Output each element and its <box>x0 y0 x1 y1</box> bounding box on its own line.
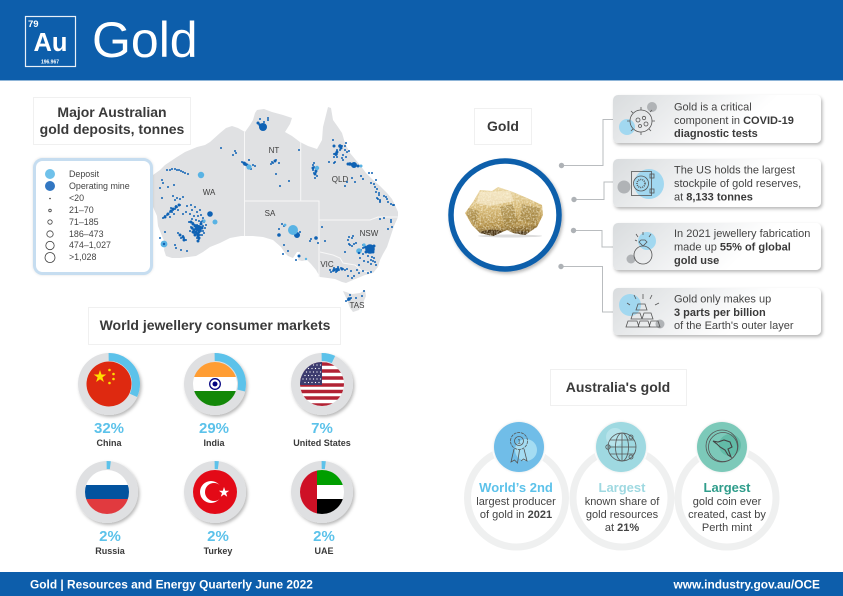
map legend: Deposit <box>69 169 100 179</box>
fact: largest known share: known share of <box>585 496 660 508</box>
state labels: SA <box>265 209 276 218</box>
icon: coin <box>695 420 749 474</box>
state labels: QLD <box>332 175 348 184</box>
donut: Russia 2% <box>76 461 138 556</box>
footer bar: www.industry.gov.au/OCE <box>673 578 820 592</box>
donut: Turkey 2%: Turkey <box>204 546 232 556</box>
donut: India 29%: India <box>203 438 225 448</box>
card: earth's outer layer: of the Earth's outer layer <box>674 320 794 332</box>
heading: gold: Gold <box>487 118 519 134</box>
map legend: 71–185 <box>69 217 99 227</box>
card: earth's outer layer <box>613 288 821 335</box>
donut: China 32%: 32% <box>94 420 124 437</box>
card: jewellery: gold use <box>674 255 719 267</box>
fact: largest gold coin: gold coin ever <box>693 496 762 508</box>
icon: gold bars <box>619 294 664 328</box>
map legend <box>34 160 152 274</box>
donut: UAE 2%: 2% <box>313 528 335 545</box>
map legend: 186–473 <box>69 229 104 239</box>
donut: China 32% <box>78 353 140 448</box>
card: earth's outer layer: Gold only makes up <box>674 294 771 306</box>
fact: largest known share: Largest <box>599 480 646 495</box>
map of Australia with gold deposits <box>149 107 398 312</box>
state labels: TAS <box>350 301 364 310</box>
connector lines <box>558 120 613 312</box>
landmass <box>149 107 398 283</box>
card: COVID-19: Gold is a critical <box>674 102 752 114</box>
donut: United States 7%: United States <box>293 438 351 448</box>
state borders <box>244 132 398 277</box>
periodic table element box <box>26 16 76 66</box>
heading: world jewellery consumer markets <box>88 308 340 344</box>
card: jewellery: In 2021 jewellery fabrication <box>674 228 810 240</box>
fact: largest known share <box>585 420 660 534</box>
icon: safe <box>618 169 664 199</box>
donut: Turkey 2%: 2% <box>207 528 229 545</box>
header banner <box>0 0 843 81</box>
fact: world's 2nd <box>476 420 556 521</box>
gold nugget in ring <box>451 161 559 269</box>
fact: world's 2nd: of gold in 2021 <box>480 509 552 521</box>
state labels <box>203 146 379 310</box>
donut: India 29%: 29% <box>199 420 229 437</box>
fact: largest gold coin <box>688 420 766 534</box>
map legend: Operating mine <box>69 181 130 191</box>
card: US reserves: The US holds the largest <box>674 164 795 176</box>
card: US reserves <box>613 159 821 207</box>
state labels: NSW <box>360 229 379 238</box>
title: Gold <box>92 12 198 68</box>
fact: largest known share: gold resources <box>586 509 659 521</box>
footer bar <box>0 572 843 596</box>
icon: diamond ring <box>626 232 656 264</box>
card: COVID-19 <box>613 95 821 143</box>
fact: largest gold coin: Perth mint <box>702 522 752 534</box>
icon: globe <box>594 420 648 474</box>
fact: largest known share: at 21% <box>605 522 639 534</box>
footer bar: Gold | Resources and Energy Quarterly June 2022 <box>30 578 313 592</box>
fact: world's 2nd: largest producer <box>476 496 556 508</box>
heading: Australia's gold <box>550 370 686 406</box>
donut: India 29% <box>184 353 246 448</box>
map legend: >1,028 <box>69 252 96 262</box>
donut: China 32%: China <box>96 438 122 448</box>
card: COVID-19: diagnostic tests <box>674 128 758 140</box>
card: US reserves: stockpile of gold reserves, <box>674 178 801 190</box>
state labels: VIC <box>320 260 334 269</box>
periodic table element box: 196.967 <box>41 60 59 66</box>
operating mines, small <box>160 118 394 301</box>
donut: Turkey 2% <box>184 461 246 556</box>
state labels: WA <box>203 188 216 197</box>
heading: gold <box>474 108 532 144</box>
donut: United States 7%: 7% <box>311 420 333 437</box>
fact: largest gold coin: created, cast by <box>688 509 766 521</box>
donut: United States 7% <box>291 353 353 448</box>
operating mines, dense clusters <box>165 123 374 270</box>
icon: rosette: 1 <box>517 440 521 446</box>
nugget <box>465 187 543 238</box>
card: earth's outer layer: 3 parts per billion <box>674 307 766 319</box>
periodic table element box: 79 <box>28 19 39 30</box>
fact: largest gold coin: Largest <box>704 480 751 495</box>
card: jewellery <box>613 223 821 270</box>
NSW large mine and centre dots <box>163 243 375 254</box>
map legend: 474–1,027 <box>69 240 111 250</box>
heading: major Australian gold deposits: gold deposits, tonnes <box>40 121 185 137</box>
heading: Australia's gold: Australia's gold <box>566 379 670 395</box>
heading: world jewellery consumer markets: World jewellery consumer markets <box>100 317 331 333</box>
Tasmania <box>343 290 366 312</box>
operating mines, large <box>195 123 357 301</box>
card: COVID-19: component in COVID-19 <box>674 115 794 127</box>
donut: UAE 2%: UAE <box>314 546 334 556</box>
card: US reserves: at 8,133 tonnes <box>674 192 753 204</box>
donut: Russia 2%: 2% <box>99 528 121 545</box>
icon: virus <box>619 102 657 135</box>
heading: major Australian gold deposits: Major Australian <box>57 104 167 120</box>
card: jewellery: made up 55% of global <box>674 242 791 254</box>
donut: UAE 2% <box>291 461 353 556</box>
deposits <box>161 164 366 260</box>
state labels: NT <box>269 146 279 155</box>
periodic table element box: Au <box>34 29 68 57</box>
map legend: <20 <box>69 193 84 203</box>
map legend: 21–70 <box>69 205 94 215</box>
fact: world's 2nd: World’s 2nd <box>479 480 553 495</box>
fact rings <box>468 449 776 547</box>
heading: major Australian gold deposits <box>34 98 190 144</box>
donut: Russia 2%: Russia <box>95 546 126 556</box>
